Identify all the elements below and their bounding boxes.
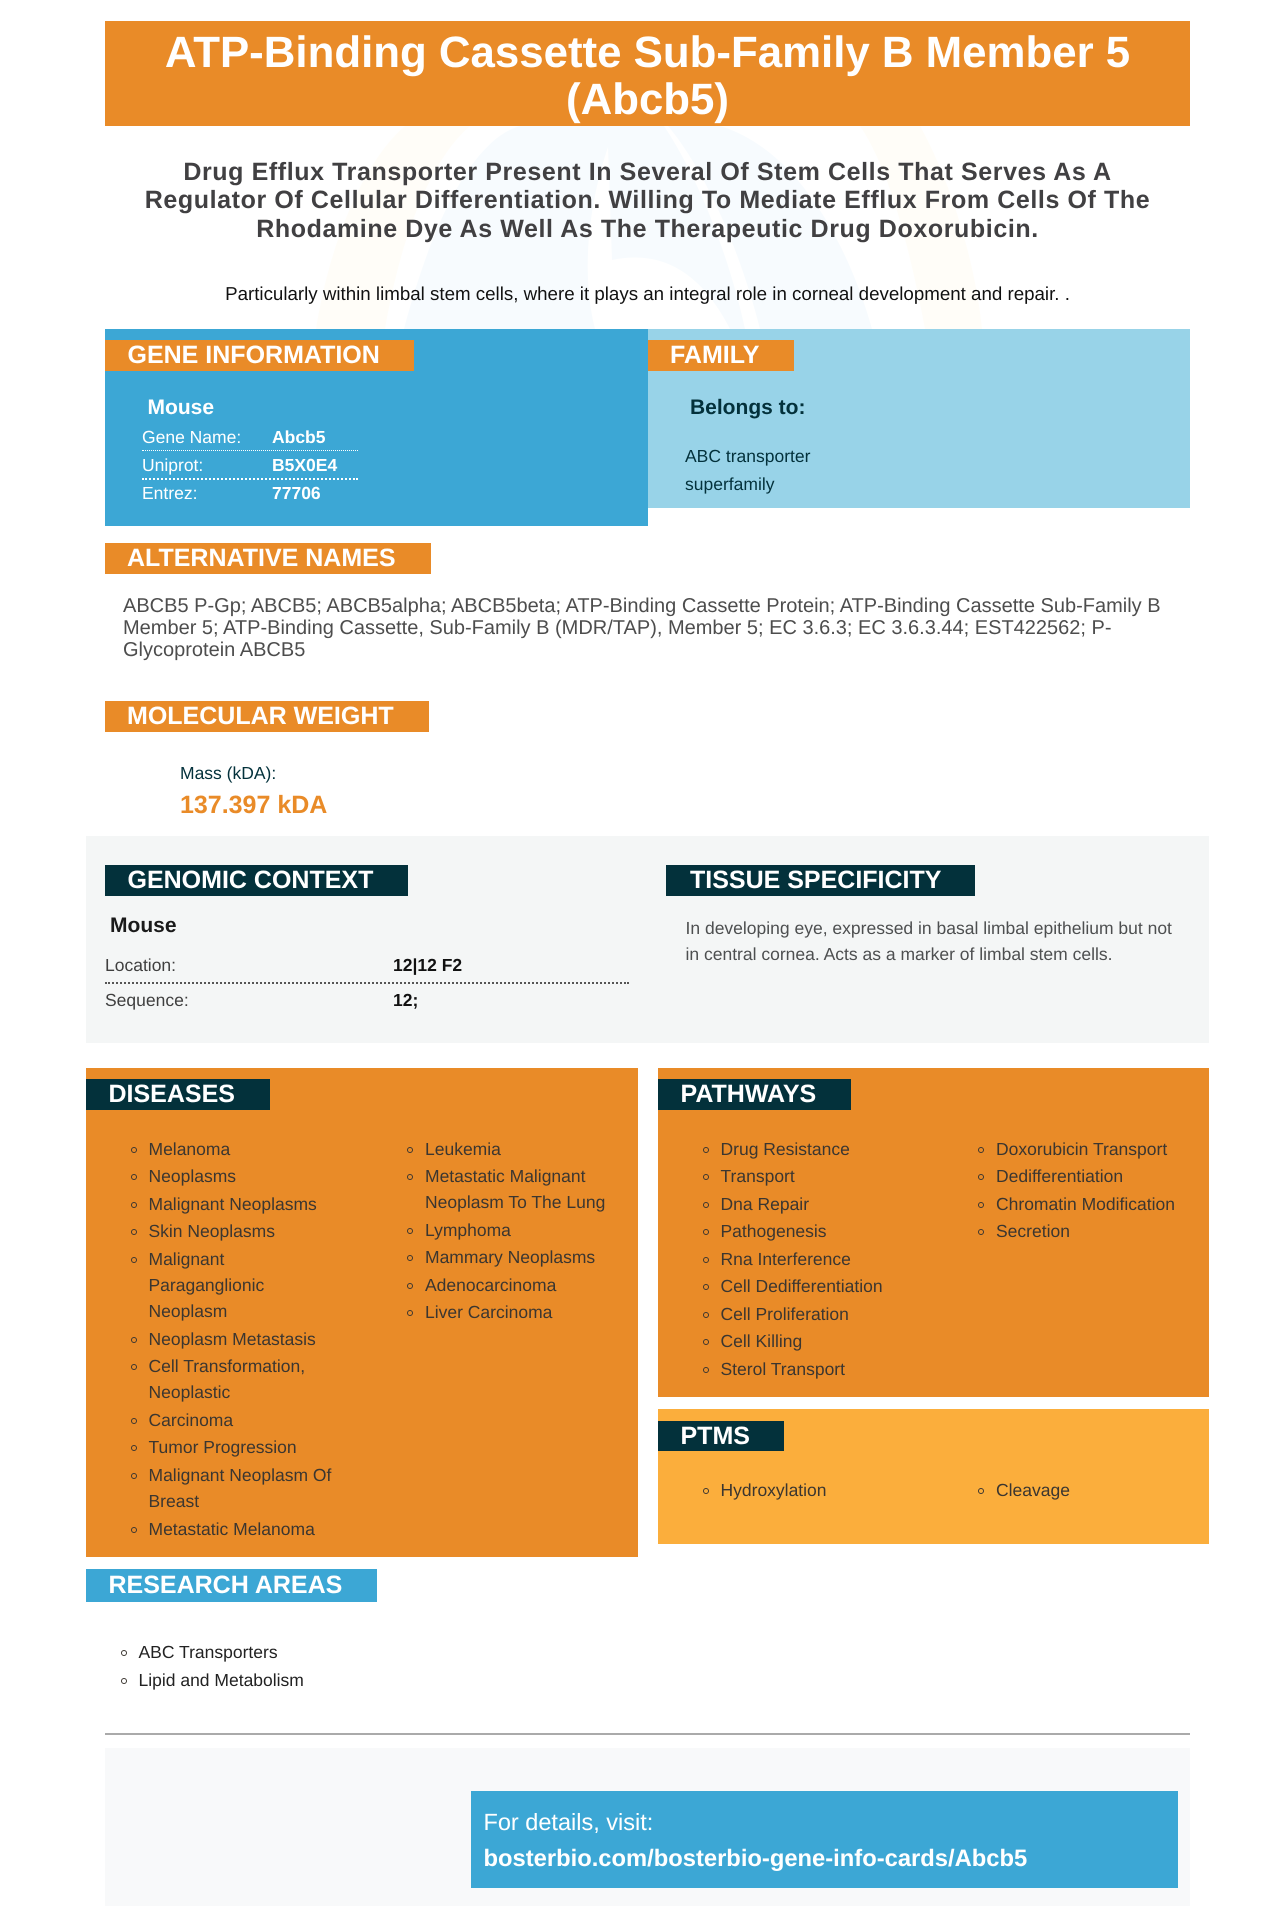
heading: gene information: GENE INFORMATION	[128, 341, 380, 369]
subtitle: Drug Efflux Transporter Present In Several Of Stem Cells That Serves As A	[183, 158, 1112, 186]
heading: ptms	[658, 1421, 784, 1451]
gene info table: Abcb5	[272, 427, 325, 447]
family value: ABC transporter	[685, 446, 810, 466]
diseases list column 2: Neoplasm To The Lung	[425, 1192, 605, 1212]
alternative names text: Glycoprotein ABCB5	[123, 639, 305, 661]
genomic table	[105, 955, 629, 1010]
genomic table: 12;	[393, 990, 418, 1010]
genomic table: Location:	[105, 955, 176, 975]
pathways list column 1: Cell Proliferation	[720, 1304, 849, 1324]
pathways list column 1: Pathogenesis	[720, 1221, 827, 1241]
diseases list column 1: Cell Transformation,	[148, 1356, 305, 1376]
pathways list column 2	[978, 1139, 1175, 1241]
heading: ptms: PTMS	[680, 1422, 750, 1450]
alternative names text	[123, 595, 1161, 661]
diseases list column 1: Malignant	[148, 1249, 224, 1269]
species label: Mouse	[110, 914, 177, 937]
gene info table: Uniprot:	[142, 455, 203, 475]
tissue specificity text	[686, 918, 1172, 964]
pathways list column 2: Dedifferentiation	[996, 1166, 1123, 1186]
panel: genomic context and tissue specificity	[86, 836, 1209, 1043]
heading: family: FAMILY	[670, 341, 759, 369]
mass value: 137.397 kDA	[180, 791, 327, 819]
diseases list column 1: Metastatic Melanoma	[148, 1519, 315, 1539]
heading: diseases: DISEASES	[108, 1080, 235, 1108]
heading: genomic context: GENOMIC CONTEXT	[128, 866, 373, 894]
pathways list column 1: Rna Interference	[720, 1249, 851, 1269]
panel: family	[648, 329, 1190, 508]
alternative names text: Member 5; ATP-Binding Cassette, Sub-Family B (MDR/TAP), Member 5; EC 3.6.3; EC 3.6.3.44; EST422562; P-	[123, 617, 1112, 639]
heading: molecular weight: MOLECULAR WEIGHT	[127, 702, 394, 730]
heading: pathways: PATHWAYS	[680, 1080, 816, 1108]
gene info table: Entrez:	[142, 483, 197, 503]
tissue specificity text: in central cornea. Acts as a marker of limbal stem cells.	[686, 944, 1112, 964]
heading: research areas: RESEARCH AREAS	[108, 1571, 342, 1599]
diseases list column 1: Neoplasms	[148, 1166, 236, 1186]
diseases list column 1: Melanoma	[148, 1139, 230, 1159]
diseases list column 2: Lymphoma	[425, 1220, 511, 1240]
subtitle: Rhodamine Dye As Well As The Therapeutic Drug Doxorubicin.	[256, 215, 1039, 243]
gene info table	[142, 427, 358, 503]
panel: gene information	[105, 329, 648, 526]
gene info table: Gene Name:	[142, 427, 241, 447]
pathways list column 2: Doxorubicin Transport	[996, 1139, 1167, 1159]
heading: family	[648, 340, 794, 371]
watermark logo	[0, 0, 1288, 340]
pathways list column 1: Cell Killing	[720, 1331, 802, 1351]
title banner: ATP-Binding Cassette Sub-Family B Member 5	[165, 28, 1130, 77]
panel: ptms	[658, 1409, 1209, 1544]
pathways list column 1: Dna Repair	[720, 1194, 809, 1214]
diseases list column 1: Tumor Progression	[148, 1437, 297, 1457]
diseases list column 2: Liver Carcinoma	[425, 1302, 552, 1322]
diseases list column 1: Paraganglionic	[148, 1275, 264, 1295]
pathways list column 2: Secretion	[996, 1221, 1070, 1241]
ptms list: Hydroxylation	[720, 1480, 827, 1500]
diseases list column 1: Carcinoma	[148, 1410, 233, 1430]
intro paragraph: Particularly within limbal stem cells, where it plays an integral role in corneal development and repair. .	[225, 283, 1070, 304]
gene info table: B5X0E4	[272, 455, 337, 475]
diseases list column 2: Metastatic Malignant	[425, 1166, 586, 1186]
pathways list column 1: Cell Dedifferentiation	[720, 1276, 883, 1296]
gene info table: 77706	[272, 483, 321, 503]
diseases list column 1: Skin Neoplasms	[148, 1221, 275, 1241]
tissue specificity text: In developing eye, expressed in basal limbal epithelium but not	[686, 918, 1172, 938]
ptms list: Cleavage	[996, 1480, 1070, 1500]
heading: research areas	[86, 1569, 377, 1602]
diseases list column 1: Breast	[148, 1491, 199, 1511]
pathways list column 1: Sterol Transport	[720, 1359, 845, 1379]
pathways list column 1: Drug Resistance	[720, 1139, 850, 1159]
diseases list column 1: Neoplasm Metastasis	[148, 1329, 316, 1349]
pathways list column 1	[703, 1139, 883, 1379]
belongs to label: Belongs to:	[690, 396, 806, 419]
genomic table: 12|12 F2	[393, 955, 462, 975]
title banner	[105, 21, 1190, 126]
family value: superfamily	[685, 474, 774, 494]
callout: details link	[471, 1791, 1178, 1888]
subtitle	[145, 158, 1150, 243]
diseases list column 2: Mammary Neoplasms	[425, 1247, 595, 1267]
heading: tissue specificity: TISSUE SPECIFICITY	[690, 866, 941, 894]
heading: diseases	[86, 1079, 270, 1110]
diseases list column 1: Neoplasm	[148, 1301, 227, 1321]
ptms list	[703, 1480, 1070, 1500]
mass label: Mass (kDA):	[180, 763, 276, 783]
diseases list column 1: Malignant Neoplasm Of	[148, 1465, 331, 1485]
diseases list column 2	[407, 1139, 605, 1322]
panel: pathways	[658, 1068, 1209, 1397]
heading: alternative names: ALTERNATIVE NAMES	[127, 544, 396, 572]
species label: Mouse	[148, 396, 214, 419]
research areas list	[121, 1642, 304, 1690]
callout: details link: bosterbio.com/bosterbio-gene-info-cards/Abcb5	[484, 1845, 1027, 1872]
diseases list column 2: Leukemia	[425, 1139, 501, 1159]
alternative names text: ABCB5 P-Gp; ABCB5; ABCB5alpha; ABCB5beta; ATP-Binding Cassette Protein; ATP-Binding Cassette Sub-Family B	[123, 595, 1161, 617]
panel: diseases	[86, 1068, 638, 1557]
heading: pathways	[658, 1079, 851, 1110]
title banner: (Abcb5)	[566, 75, 729, 124]
research areas list: Lipid and Metabolism	[138, 1670, 304, 1690]
family value	[685, 446, 810, 494]
genomic table: Sequence:	[105, 990, 189, 1010]
pathways list column 2: Chromatin Modification	[996, 1194, 1175, 1214]
subtitle: Regulator Of Cellular Differentiation. Willing To Mediate Efflux From Cells Of The	[145, 186, 1150, 214]
diseases list column 1: Neoplastic	[148, 1382, 230, 1402]
pathways list column 1: Transport	[720, 1166, 795, 1186]
diseases list column 1: Malignant Neoplasms	[148, 1194, 317, 1214]
research areas list: ABC Transporters	[138, 1642, 278, 1662]
diseases list column 2: Adenocarcinoma	[425, 1275, 556, 1295]
diseases list column 1	[131, 1139, 332, 1539]
callout: details link: For details, visit:	[484, 1809, 653, 1835]
panel: footer	[105, 1748, 1190, 1906]
